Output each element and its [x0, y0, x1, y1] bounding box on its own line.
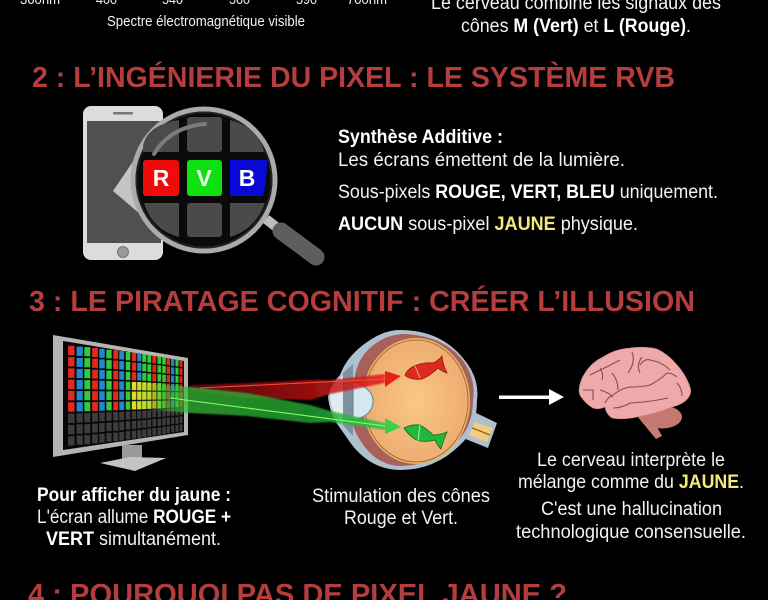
text block: brain caption: C'est une hallucination	[541, 499, 722, 520]
text block: brain caption: technologique consensuelle.	[516, 522, 746, 543]
green fish cone	[404, 425, 447, 449]
text block: additive synthesis: AUCUN sous-pixel JAUNE physique.	[338, 214, 638, 235]
text block: monitor caption: L'écran allume ROUGE +	[37, 507, 231, 528]
iris	[343, 364, 353, 436]
text block: additive synthesis: Sous-pixels ROUGE, VERT, BLEU uniquement.	[338, 182, 718, 203]
magnifier lens	[133, 109, 275, 251]
monitor frame	[53, 335, 188, 457]
pixel V	[187, 160, 222, 196]
lens	[353, 382, 373, 420]
pixel grid	[68, 346, 182, 446]
monitor stand	[100, 445, 166, 471]
text block: eye caption: Rouge et Vert.	[344, 508, 458, 529]
heading: section 2: 2 : L’INGÉNIERIE DU PIXEL : LE SYSTÈME RVB	[32, 60, 675, 94]
spectrum axis labels	[20, 0, 387, 7]
brain folds	[583, 352, 682, 408]
monitor screen	[63, 341, 184, 450]
cerebellum	[642, 406, 682, 428]
cerebrum	[579, 347, 691, 419]
pixel B: B	[239, 165, 255, 191]
optic nerve	[458, 410, 497, 448]
icon: phone with magnifier	[83, 106, 316, 260]
text block: monitor caption: VERT simultanément.	[46, 529, 221, 550]
text block: monitor caption	[37, 485, 231, 550]
text block: eye caption	[312, 486, 490, 529]
text block: monitor caption: Pour afficher du jaune :	[37, 485, 231, 506]
choroid	[353, 334, 474, 466]
icon: brain	[579, 347, 691, 439]
illustration: eye	[328, 330, 497, 470]
arrow: eye to brain	[499, 389, 564, 405]
illustration: monitor	[53, 335, 188, 471]
beam: red light	[190, 371, 401, 400]
text block: additive synthesis: Les écrans émettent de la lumière.	[338, 150, 625, 171]
magnifier handle	[266, 219, 316, 257]
pixel R: R	[153, 165, 170, 191]
pixel B	[230, 160, 267, 196]
text block: additive synthesis: Synthèse Additive :	[338, 127, 503, 148]
yellow pixels	[132, 382, 161, 409]
text block: brain caption: mélange comme du JAUNE.	[518, 472, 744, 493]
text block: brain caption: Le cerveau interprète le	[537, 450, 725, 471]
brain stem	[637, 414, 662, 439]
beam: green light	[133, 383, 401, 434]
text block: additive synthesis	[338, 127, 718, 235]
retina	[362, 338, 470, 464]
panel: section 1 remainder	[20, 0, 721, 37]
text block: eye caption: Stimulation des cônes	[312, 486, 490, 507]
pixel V: V	[196, 165, 212, 191]
vitreous body	[364, 340, 468, 462]
heading: section 3: 3 : LE PIRATAGE COGNITIF : CRÉER L’ILLUSION	[29, 284, 695, 318]
sclera and cornea	[328, 330, 477, 470]
red fish cone	[405, 356, 447, 379]
text block: brain caption	[516, 450, 746, 543]
phone	[83, 106, 163, 260]
brain signal note	[431, 0, 721, 37]
spectrum caption: Spectre électromagnétique visible	[107, 13, 305, 30]
brain signal note: cônes M (Vert) et L (Rouge).	[461, 16, 691, 37]
anterior chamber	[330, 375, 343, 424]
pixel R	[143, 160, 179, 196]
